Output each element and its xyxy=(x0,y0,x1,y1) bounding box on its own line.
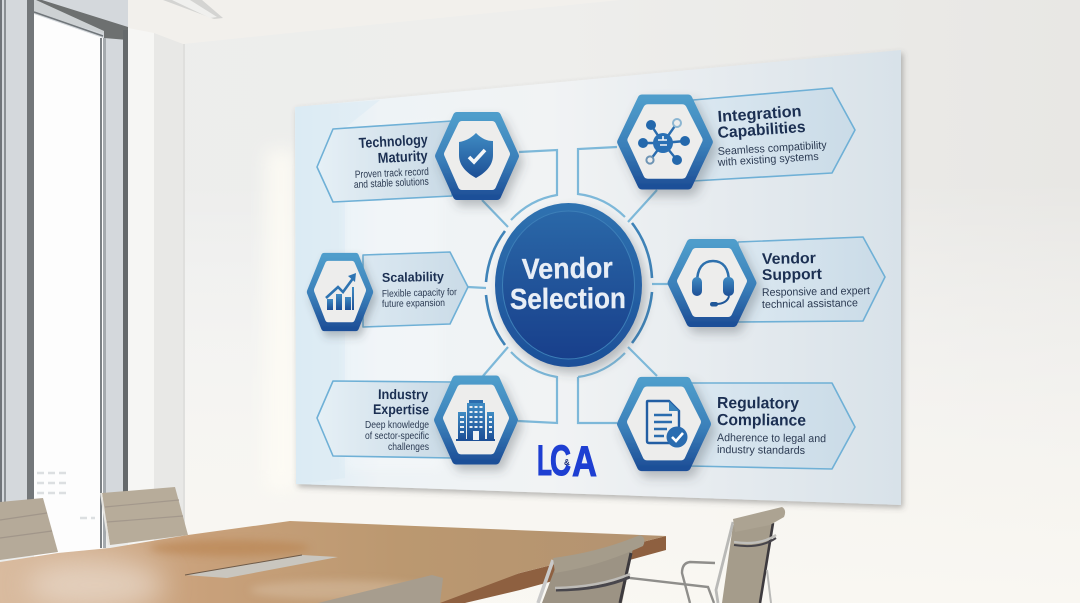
icon: document with check xyxy=(647,401,688,448)
panel: Regulatory Compliance: Adherence to legal and xyxy=(717,432,826,445)
panel: Vendor Support: technical assistance xyxy=(762,297,858,311)
panel: Technology Maturity: Proven track record xyxy=(355,166,429,181)
panel: Regulatory Compliance: industry standards xyxy=(717,444,806,457)
panel: Technology Maturity: Maturity xyxy=(377,148,428,167)
panel: Regulatory Compliance: Compliance xyxy=(717,412,806,430)
panel: Industry Expertise: Industry xyxy=(378,386,428,402)
chair: near left xyxy=(318,575,443,603)
panel: Scalability: Scalability xyxy=(382,269,445,285)
wall board xyxy=(295,50,901,505)
logo: LC&A: C xyxy=(550,437,571,485)
panel: Scalability xyxy=(310,252,468,328)
logo: LC&A: & xyxy=(564,458,570,467)
panel: Technology Maturity: Technology xyxy=(358,132,428,152)
panel: Industry Expertise xyxy=(317,380,514,460)
icon: network xyxy=(638,119,690,165)
window xyxy=(0,0,128,560)
panel: Integration Capabilities: with existing systems xyxy=(716,151,819,169)
conference table xyxy=(0,521,666,603)
panel: Integration Capabilities: Integration xyxy=(717,103,802,126)
panel: Vendor Support: Support xyxy=(762,266,822,284)
panel: Vendor Support: Vendor xyxy=(762,250,816,268)
central circle: Vendor Selection xyxy=(495,203,642,367)
panel: Industry Expertise: challenges xyxy=(388,442,429,453)
chair: near center xyxy=(538,535,714,603)
chairs xyxy=(0,487,785,603)
logo: LC&A xyxy=(537,437,597,486)
icon: headset xyxy=(692,261,734,306)
icon: building xyxy=(456,400,495,441)
logo: LC&A: A xyxy=(572,438,597,486)
panel: Scalability: future expansion xyxy=(382,298,445,310)
panel: Industry Expertise: of sector-specific xyxy=(365,431,429,442)
panel: Industry Expertise: Deep knowledge xyxy=(365,420,429,431)
logo: LC&A: L xyxy=(537,437,552,485)
panel: Technology Maturity: and stable solutions xyxy=(354,176,429,191)
icon: shield xyxy=(459,133,493,178)
panel: Integration Capabilities: Seamless compatibility xyxy=(717,139,827,158)
panel: Vendor Support: Responsive and expert xyxy=(762,285,870,299)
panel: Technology Maturity xyxy=(317,116,515,202)
panel: Scalability: Flexible capacity for xyxy=(382,287,458,300)
panel: Regulatory Compliance: Regulatory xyxy=(717,395,799,413)
icon: growth chart xyxy=(326,273,356,310)
panel: Vendor Support xyxy=(672,237,885,323)
connectors and ring xyxy=(468,147,668,423)
panel: Integration Capabilities xyxy=(622,88,855,185)
chair: far second xyxy=(101,487,188,545)
chair: right xyxy=(682,507,785,603)
central circle: Vendor Selection: Vendor xyxy=(522,252,613,286)
panel: Integration Capabilities: Capabilities xyxy=(717,119,806,142)
chair: far left xyxy=(0,498,58,560)
central circle: Vendor Selection: Selection xyxy=(510,283,626,316)
panel: Industry Expertise: Expertise xyxy=(373,401,429,417)
panel: Regulatory Compliance xyxy=(621,381,855,469)
